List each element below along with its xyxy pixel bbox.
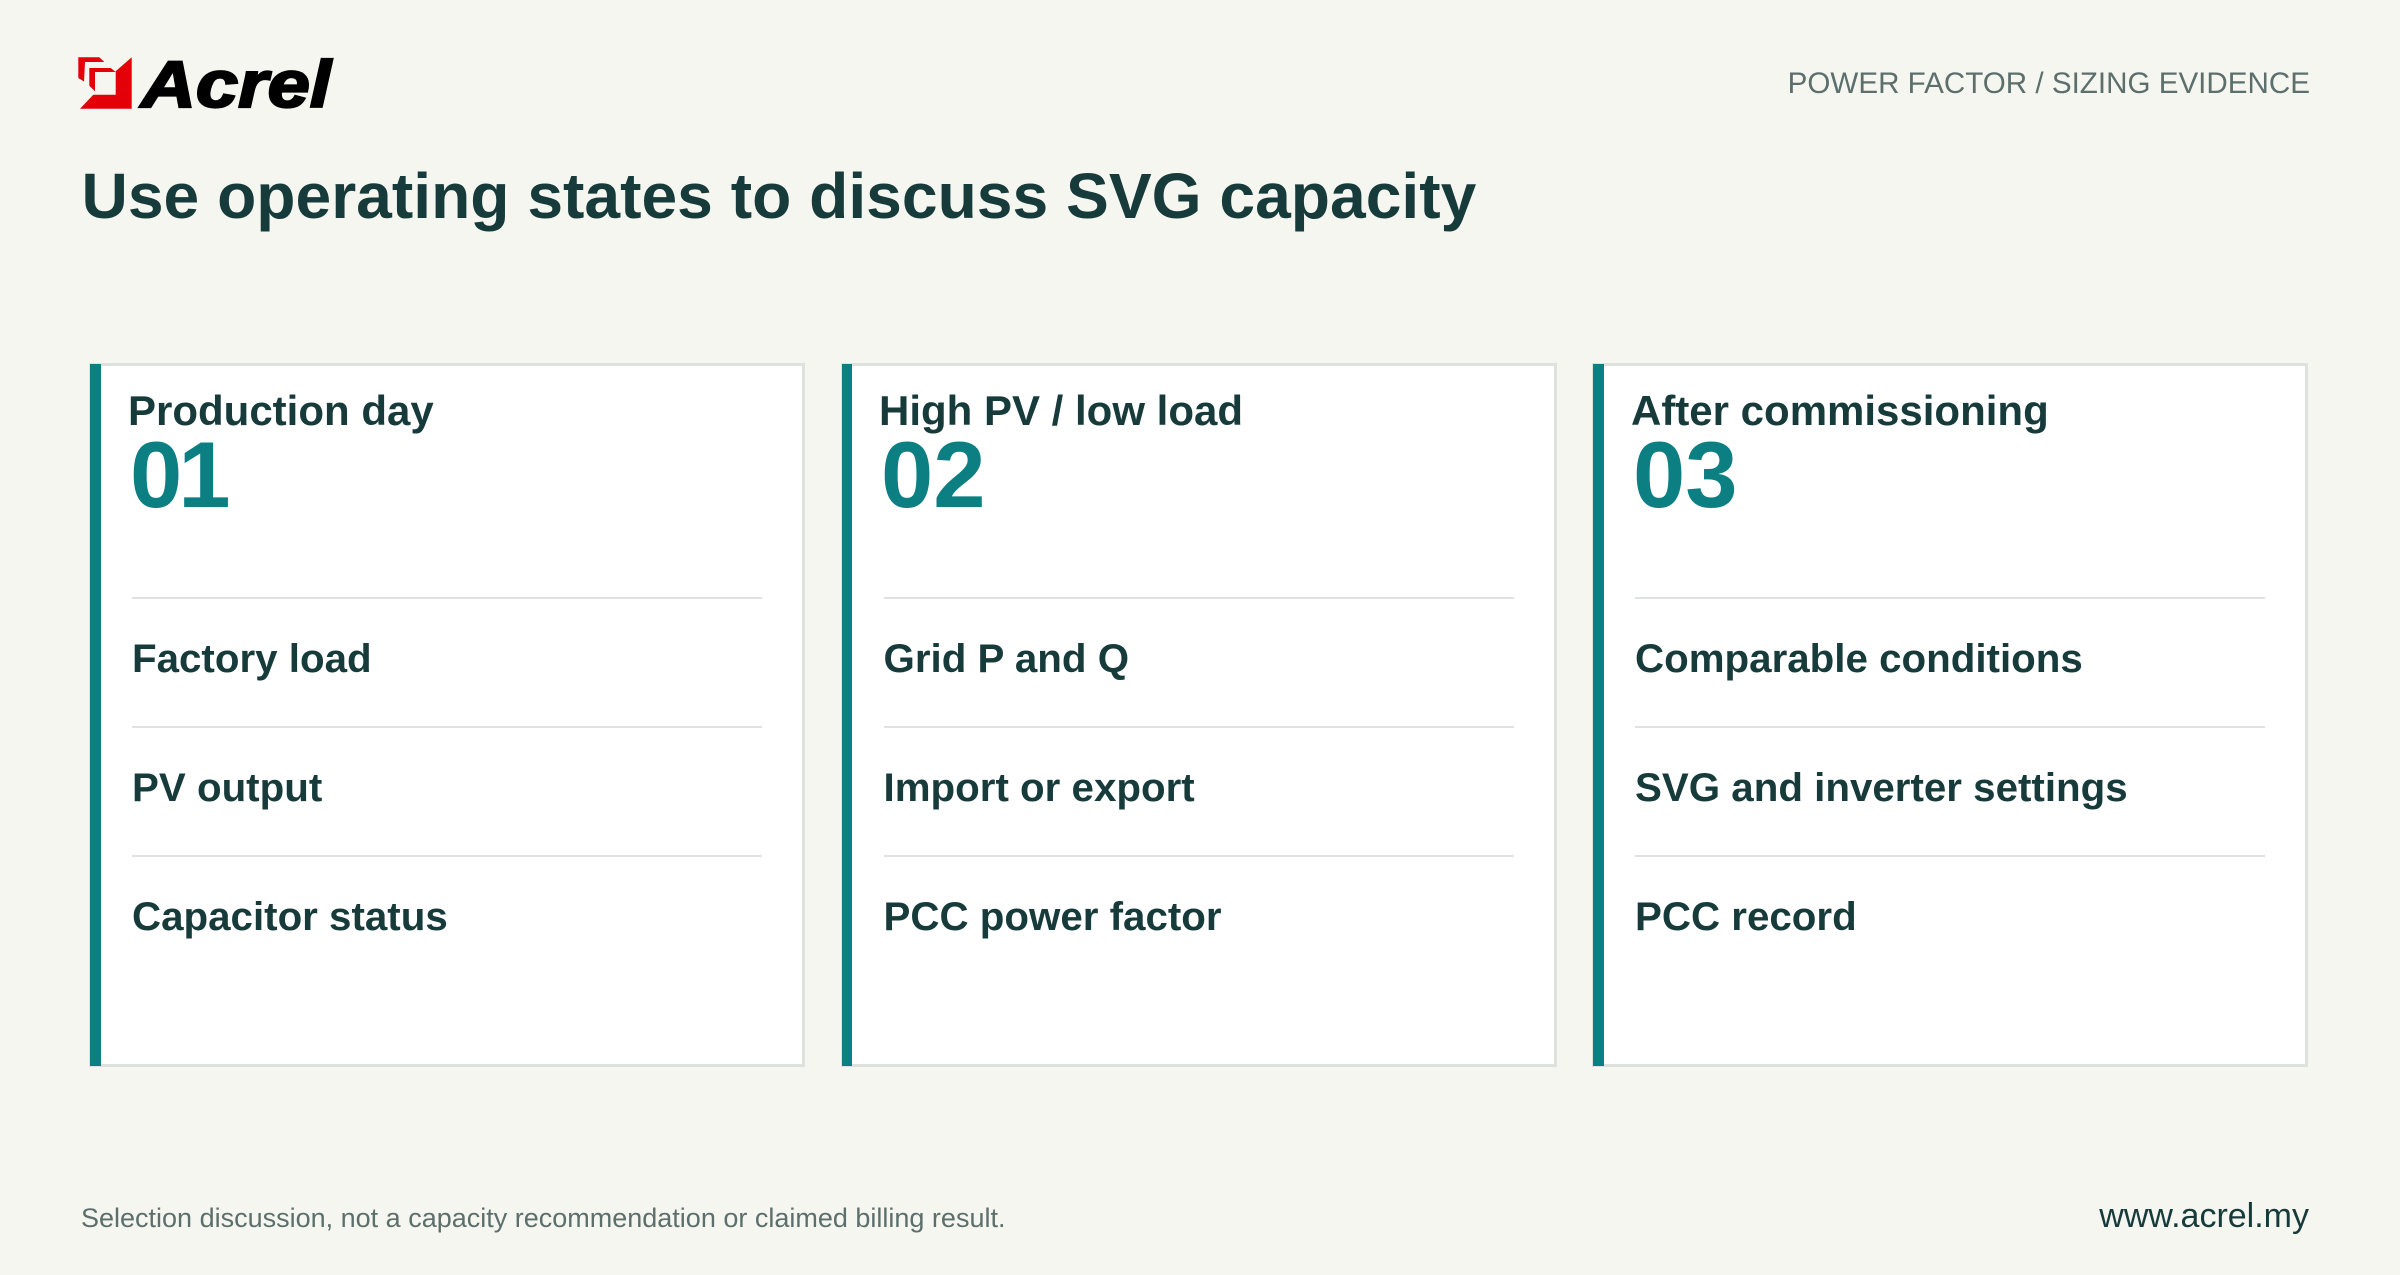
item: PCC power factor — [884, 894, 1222, 939]
panel: High PV / low load — [841, 363, 1557, 1067]
card background — [840, 363, 1556, 1067]
item: Capacitor status — [132, 894, 448, 939]
item: PCC record — [1635, 894, 1857, 939]
panel: Production day — [89, 363, 805, 1067]
item: Factory load — [132, 636, 372, 681]
item: SVG and inverter settings — [1635, 765, 2128, 810]
card heading: After commissioning — [1631, 387, 2049, 434]
item: Import or export — [884, 765, 1195, 810]
panel: After commissioning — [1592, 363, 2308, 1067]
card background — [1592, 363, 2308, 1067]
card number: 01 — [130, 422, 227, 527]
item: Grid P and Q — [884, 636, 1129, 681]
logo: Acrel — [78, 50, 334, 120]
card heading: High PV / low load — [879, 387, 1243, 434]
footer note: Selection discussion, not a capacity recommendation or claimed billing result. — [81, 1203, 1005, 1233]
card accent bar — [842, 364, 852, 1066]
card accent bar — [90, 364, 100, 1066]
card heading: Production day — [128, 387, 434, 434]
icon: Acrel red mark — [78, 57, 132, 109]
card number: 02 — [881, 422, 986, 527]
card accent bar — [1593, 364, 1604, 1066]
card background — [89, 363, 805, 1067]
header tag: POWER FACTOR / SIZING EVIDENCE — [1788, 67, 2310, 100]
card number: 03 — [1633, 422, 1738, 527]
item: Comparable conditions — [1635, 636, 2083, 681]
footer url: www.acrel.my — [2099, 1197, 2309, 1235]
title: Use operating states to discuss SVG capacity — [82, 160, 1476, 232]
item: PV output — [132, 765, 322, 810]
